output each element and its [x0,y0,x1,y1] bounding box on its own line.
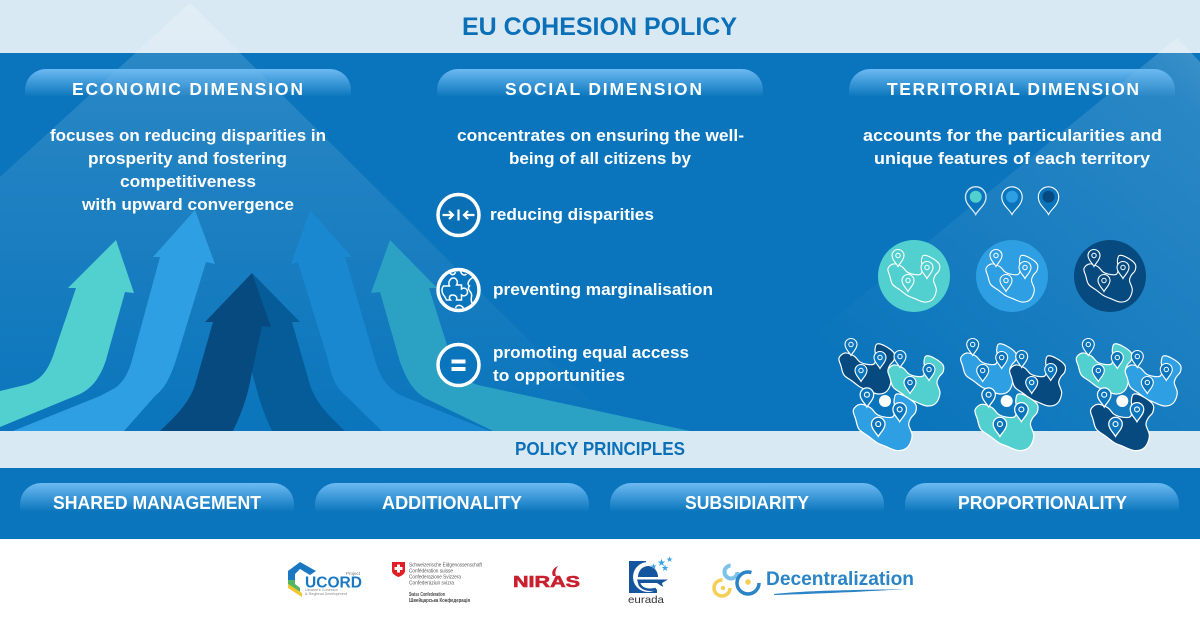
bottom white footer [0,539,1200,628]
description: being of all citizens by [509,149,692,168]
logo: eurada: ★ [661,563,669,573]
map cluster 2 [961,338,1066,451]
heading button [437,69,763,100]
principle: proportionality [905,483,1179,515]
description: competitiveness [120,172,256,191]
heading: ECONOMIC DIMENSION [72,79,303,99]
map cluster 1 [839,338,944,451]
label: promoting equal access: promoting equal access [493,343,689,362]
logo: eurada: eurada [628,594,664,606]
principle: additionality: ADDITIONALITY [382,493,522,513]
principle: subsidiarity: SUBSIDIARITY [685,493,809,513]
logo: Swiss Confederation: Swiss Confederation [409,592,445,598]
policy principles band [0,431,1200,468]
map cluster 3 [1076,338,1181,451]
icon: puzzle globe [438,270,479,310]
logo: eurada: ★ [666,555,673,564]
label: reducing disparities: reducing disparities [490,205,654,224]
label: promoting equal access [493,343,689,385]
icon: teal territory circle [878,240,950,312]
logo: NIRAS: NIRAS [513,574,580,591]
panel: economic dimension [25,69,351,214]
logo: Swiss Confederation [392,562,482,604]
description [457,126,744,168]
description [50,126,326,214]
heading: TERRITORIAL DIMENSION [887,79,1139,99]
logo: UCORD: UCORD [305,574,362,592]
logo: Decentralization [714,566,914,596]
logo: Swiss Confederation: Швейцарська Конфедерація [409,597,470,604]
icon: equals [438,344,479,386]
icon: light blue territory circle [976,240,1048,312]
logo: Swiss Confederation: Confederazione Svizzera [409,574,461,580]
icon: three location pins [966,187,1059,214]
label: preventing marginalisation: preventing marginalisation [493,280,713,299]
heading: SOCIAL DIMENSION [505,79,702,99]
panel: social dimension [437,69,763,386]
principle: shared management: SHARED MANAGEMENT [53,493,261,513]
description: focuses on reducing disparities in [50,126,326,145]
logo: Decentralization: Decentralization [766,569,914,590]
label: promoting equal access: to opportunities [493,366,625,385]
icon: reducing disparities [438,194,479,236]
description: prosperity and fostering [88,149,287,168]
logo: UCORD [288,562,362,597]
heading button [849,69,1175,100]
logo: Swiss Confederation: Confédération suisse [409,568,453,574]
logo: eurada: ★ [657,558,666,569]
heading button [25,69,351,100]
principle: subsidiarity [610,483,884,515]
principle: proportionality: PROPORTIONALITY [958,493,1127,513]
logo: eurada: ★ [650,562,657,571]
logo: NIRAS [513,566,580,591]
heading: policy principles: POLICY PRINCIPLES [515,439,685,459]
icon: dark territory circle [1074,240,1146,312]
description: concentrates on ensuring the well- [457,126,744,145]
decorative upward arrows [0,3,1200,431]
description [863,126,1162,168]
logo: Swiss Confederation: Schweizerische Eidgenossenschaft [409,562,482,568]
description: with upward convergence [81,195,294,214]
panel: territorial dimension [839,69,1181,451]
principle: shared management [20,483,294,515]
principle: additionality [315,483,589,515]
header band [0,0,1200,53]
logo: UCORD: & Regional Development [305,592,348,596]
logo: UCORD: Ukraine's Cohesion [305,588,338,592]
description: unique features of each territory [874,149,1151,168]
title: EU COHESION POLICY [462,13,737,41]
logo: eurada [628,555,673,606]
logo: UCORD: Project [346,571,361,576]
logo: Swiss Confederation: Confederaziun svizra [409,580,454,586]
description: accounts for the particularities and [863,126,1162,145]
